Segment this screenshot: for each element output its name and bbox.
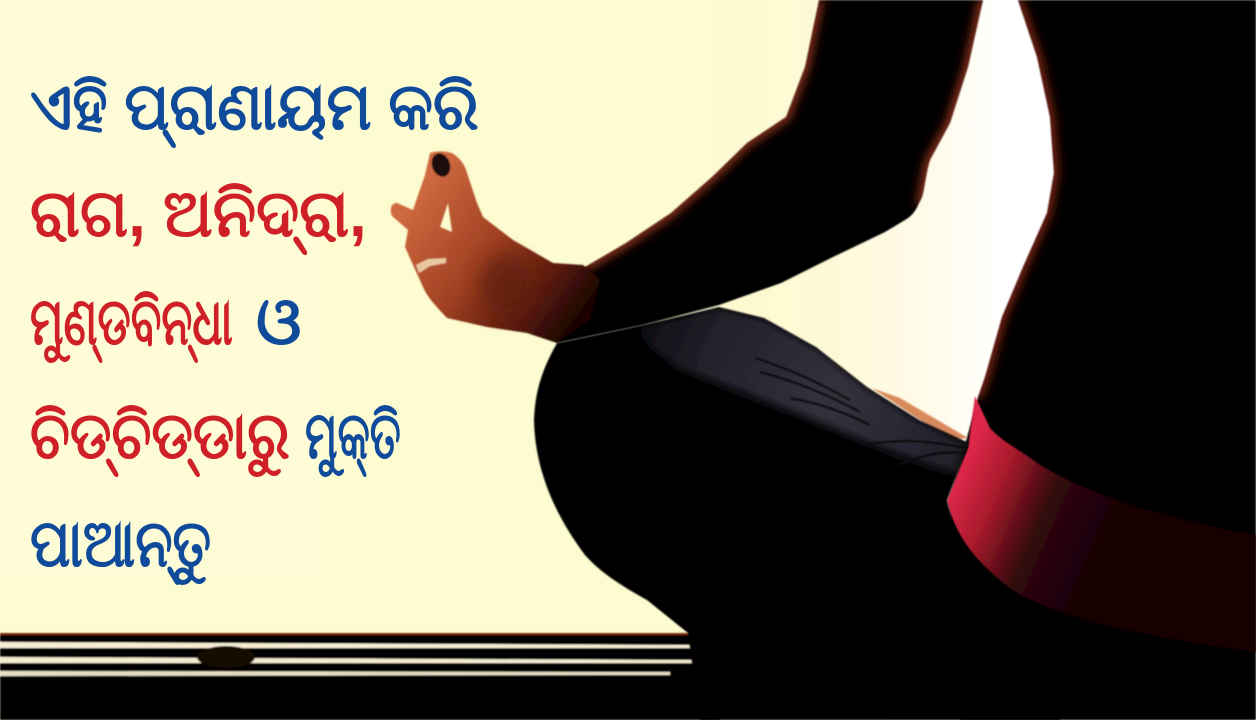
leg highlight: [640, 308, 966, 473]
crossed leg: [534, 307, 1060, 720]
waistband: [947, 396, 1256, 652]
headline line 3 red: ମୁଣ୍ଡବିନ୍ଧା: [30, 284, 233, 358]
headline line 4 red: ଚିଡ୍‌ଚିଡ୍ଡାରୁ: [30, 398, 290, 472]
headline line 5: ପାଆନ୍ତୁ: [30, 506, 211, 580]
hand: [391, 151, 600, 343]
headline: [30, 69, 479, 585]
headline line 2: ରାଗ, ଅନିଦ୍ରା,: [30, 176, 367, 250]
window sill: [0, 633, 720, 720]
torso silhouette: [950, 0, 1256, 720]
arm silhouette: [540, 0, 983, 343]
ring: [416, 258, 446, 273]
headline line 1: ଏହି ପ୍ରାଣାୟମ କରି: [30, 69, 479, 143]
fingernail: [428, 151, 454, 179]
headline line 4 blue: ମୁକ୍ତି: [305, 398, 401, 472]
leg fold lines: [755, 358, 966, 465]
palm shadow: [479, 255, 531, 315]
dark knot on sill: [197, 646, 255, 668]
skin sliver behind leg: [872, 388, 968, 440]
lighter text backing: [0, 0, 325, 575]
headline line 3 blue: ଓ: [256, 284, 301, 358]
